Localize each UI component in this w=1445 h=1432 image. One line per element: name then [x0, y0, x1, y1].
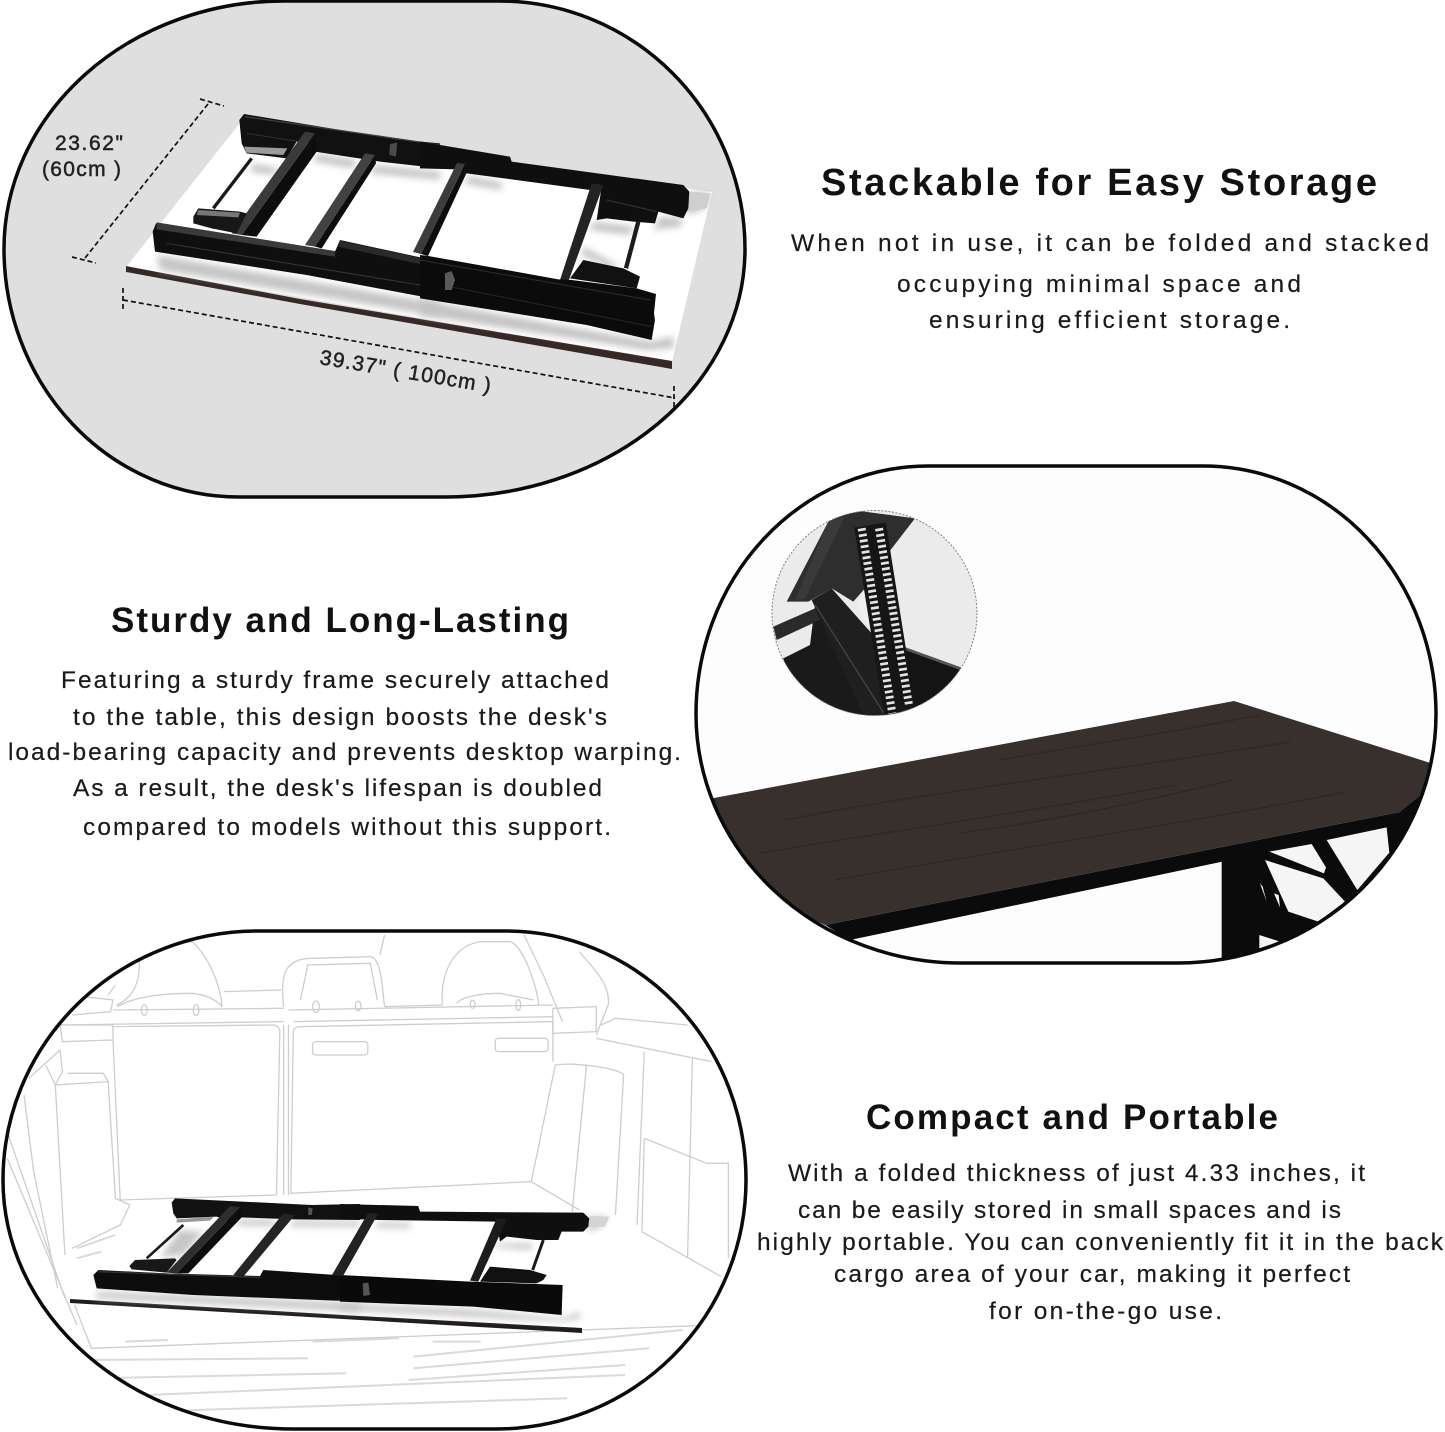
- text block: stackable: [791, 230, 1429, 334]
- dimension label: width inches: 23.62": [55, 132, 123, 155]
- desk leg: [1222, 827, 1400, 958]
- heading: compact: Compact and Portable: [866, 1098, 1278, 1137]
- text block: compact: With a folded thickness of just 4.33 inches, it: [788, 1160, 1365, 1187]
- text block: compact: can be easily stored in small spaces and is: [798, 1197, 1341, 1224]
- folded frame: [93, 1198, 609, 1322]
- heading: sturdy: Sturdy and Long-Lasting: [111, 601, 569, 640]
- panel: folded desk in car boot: [3, 931, 746, 1429]
- text block: stackable: ensuring efficient storage.: [929, 307, 1290, 334]
- dimension label: width metric: (60cm ): [42, 158, 121, 181]
- text block: sturdy: load-bearing capacity and prevents desktop warping.: [8, 739, 681, 766]
- desk top: [690, 701, 1440, 940]
- panel: desk top and spring detail: [690, 466, 1440, 970]
- text block: compact: cargo area of your car, making it perfect: [834, 1261, 1350, 1288]
- text block: sturdy: As a result, the desk's lifespan is doubled: [73, 775, 602, 802]
- text block: compact: highly portable. You can conveniently fit it in the back: [757, 1229, 1444, 1256]
- folded frame: [153, 114, 711, 350]
- dimension lines: [72, 99, 675, 411]
- text block: compact: for on-the-go use.: [989, 1298, 1222, 1325]
- text block: sturdy: [8, 667, 681, 841]
- text block: sturdy: Featuring a sturdy frame securely attached: [61, 667, 609, 694]
- text block: sturdy: compared to models without this support.: [83, 814, 611, 841]
- inset: spring detail: [772, 510, 977, 725]
- text block: stackable: occupying minimal space and: [897, 271, 1301, 298]
- text block: sturdy: to the table, this design boosts the desk's: [73, 704, 607, 731]
- car interior line drawing: [5, 935, 728, 1412]
- panel: folded dimensions: [4, 1, 745, 497]
- text block: stackable: When not in use, it can be folded and stacked: [791, 230, 1429, 257]
- text block: compact: [757, 1160, 1444, 1325]
- cargo board: [70, 1299, 582, 1333]
- dimension label: length: 39.37" ( 100cm ): [318, 346, 493, 397]
- heading: stackable: Stackable for Easy Storage: [821, 162, 1377, 204]
